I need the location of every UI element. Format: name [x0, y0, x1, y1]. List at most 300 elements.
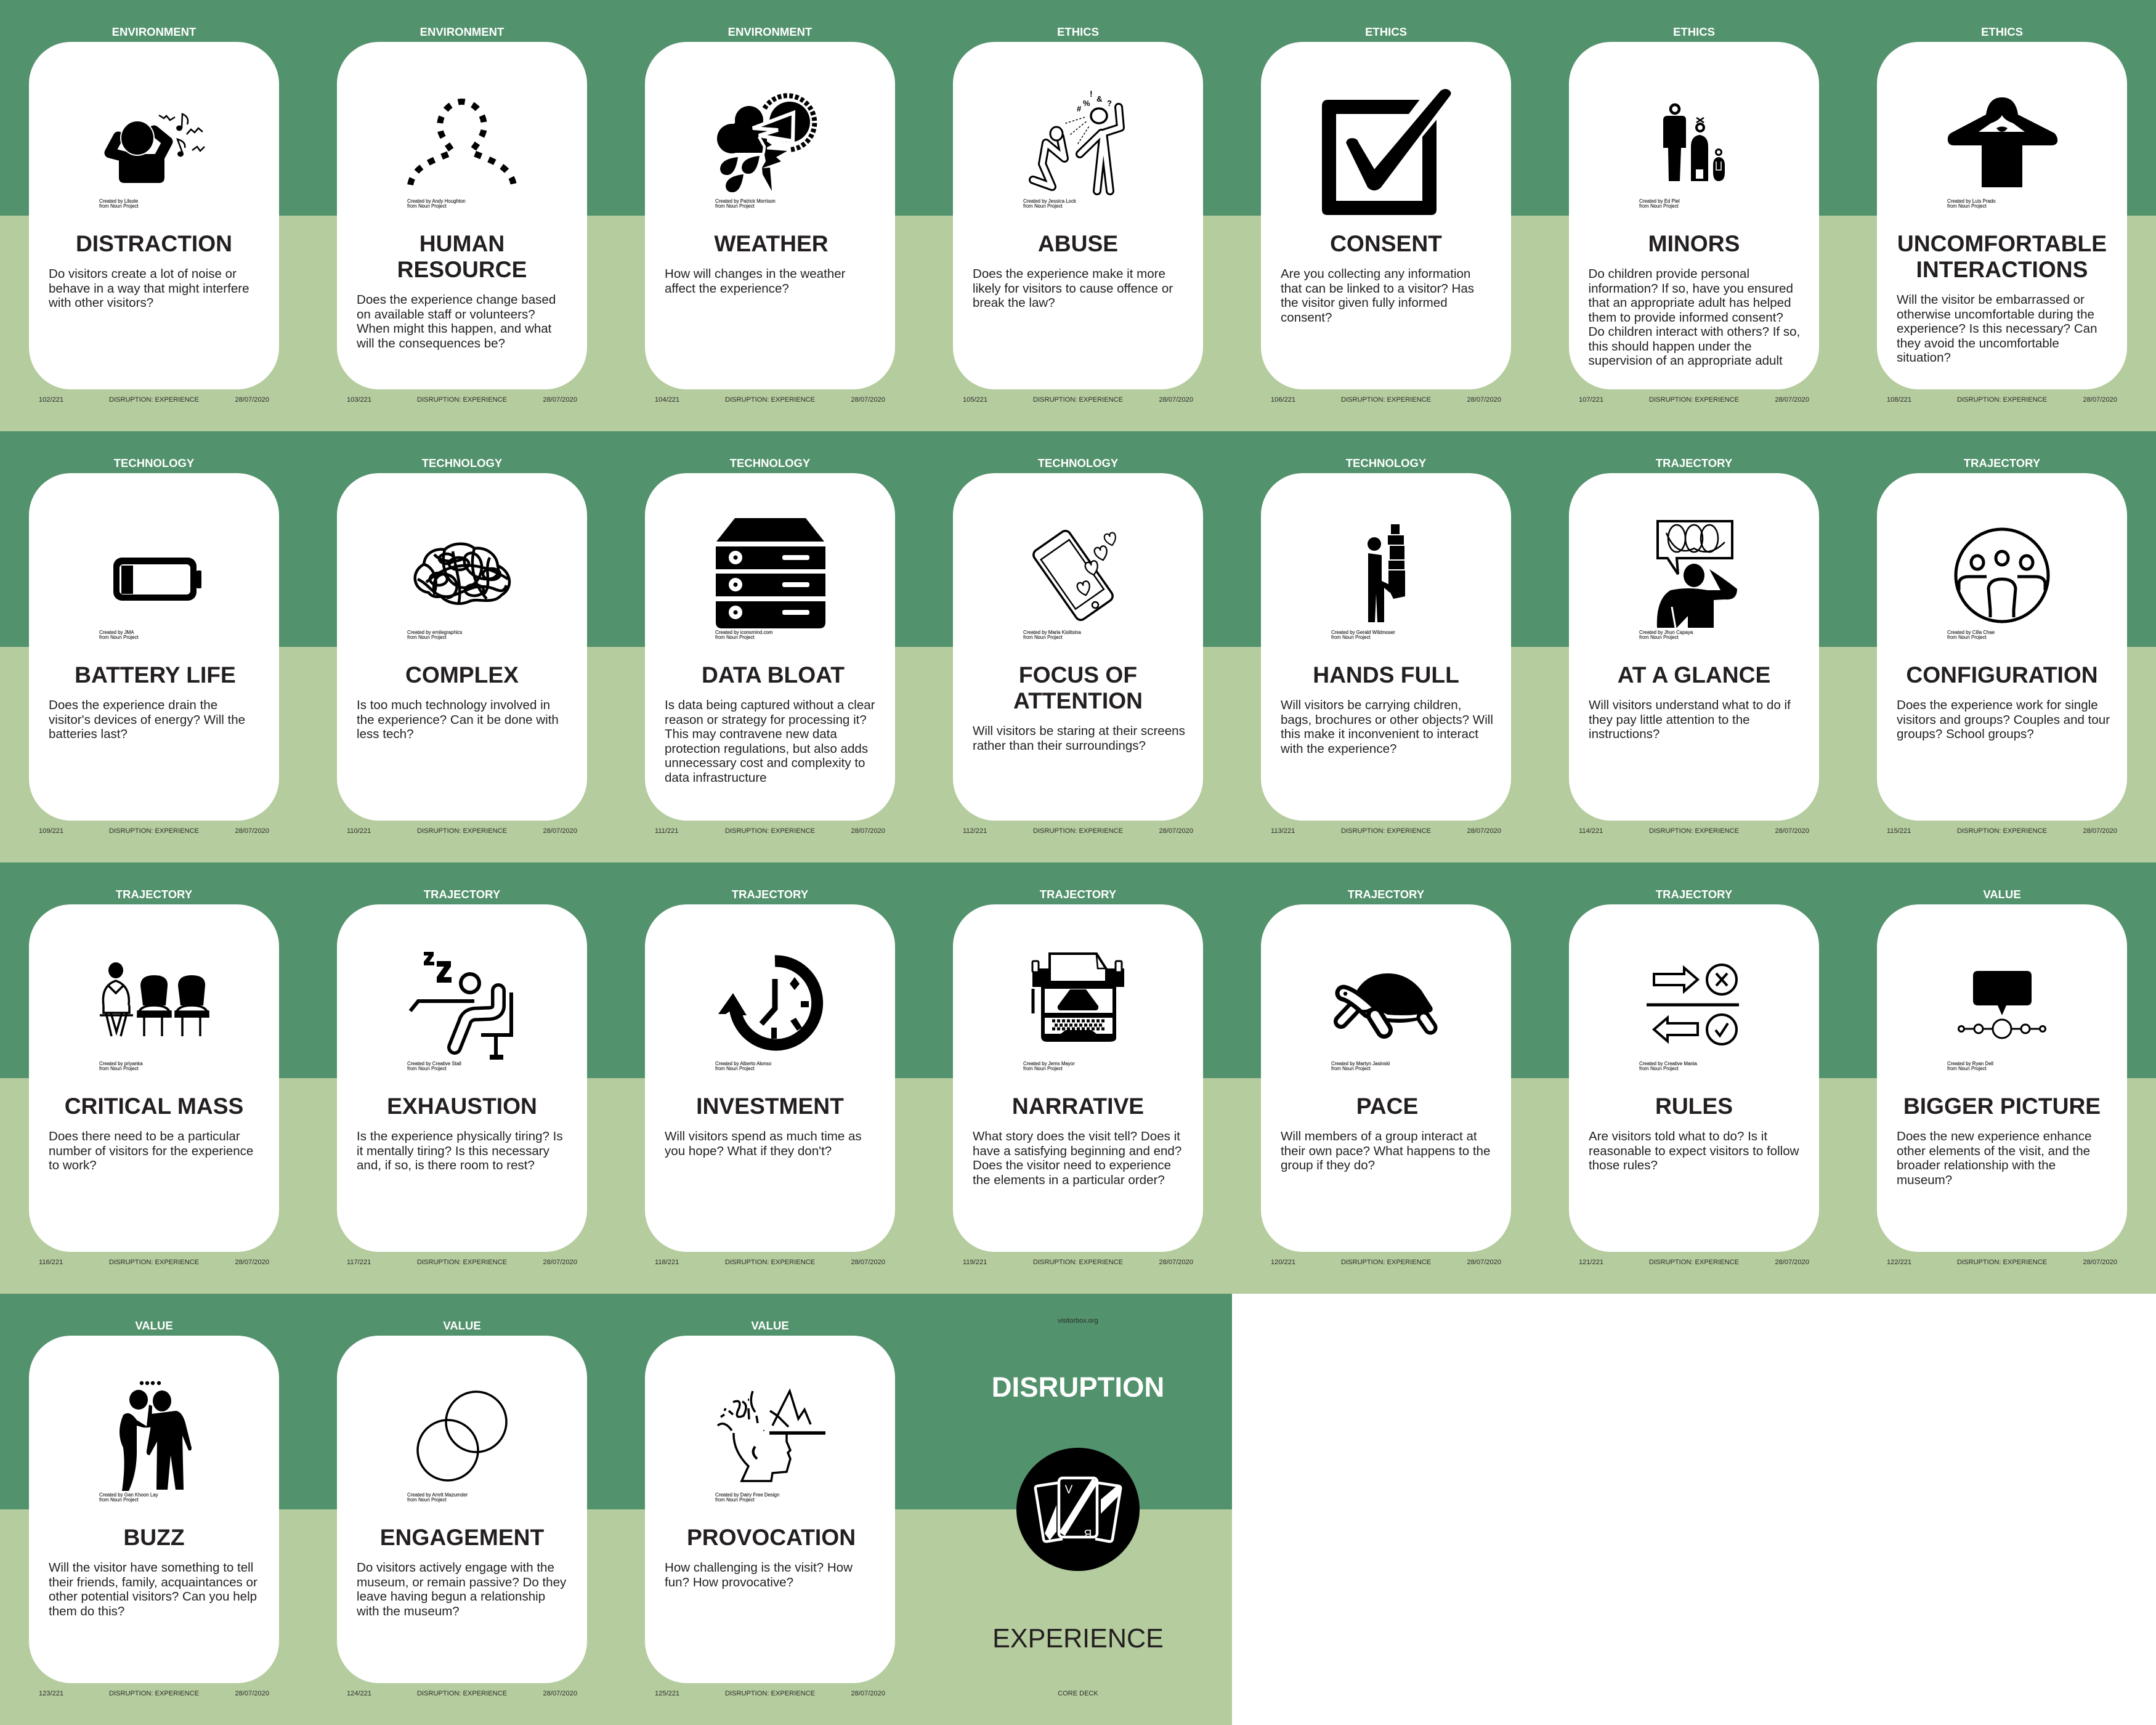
body text: consent? — [1281, 310, 1332, 324]
body text: leave having begun a relationship — [357, 1589, 545, 1604]
title: PROVOCATION — [687, 1524, 856, 1550]
footer: 116/221 — [39, 1259, 63, 1266]
title: RULES — [1655, 1093, 1733, 1119]
white card — [1569, 904, 1819, 1252]
footer: DISRUPTION: EXPERIENCE — [725, 1259, 815, 1266]
deck label: CORE DECK — [1058, 1690, 1098, 1697]
card: exhaustion — [308, 862, 616, 1294]
title: EXHAUSTION — [387, 1093, 537, 1119]
title: INTERACTIONS — [1916, 256, 2088, 282]
category label: TECHNOLOGY — [730, 457, 810, 469]
body text: otherwise uncomfortable during the — [1897, 307, 2094, 322]
icon credit — [407, 198, 466, 209]
footer: DISRUPTION: EXPERIENCE — [109, 396, 199, 404]
icon: figure shouting at kneeling figure: ! — [1090, 89, 1093, 99]
body text: and, if so, is there room to rest? — [357, 1158, 535, 1172]
icon credit: Created by Ryan Dell — [1947, 1061, 1993, 1066]
footer: DISRUPTION: EXPERIENCE — [1033, 1259, 1123, 1266]
body text: they pay little attention to the — [1589, 712, 1750, 727]
body text: unnecessary cost and complexity to — [665, 756, 865, 770]
body text — [665, 267, 846, 296]
category label: ENVIRONMENT — [112, 25, 196, 38]
footer — [616, 1259, 924, 1267]
footer: 122/221 — [1887, 1259, 1911, 1266]
body text: Will visitors spend as much time as — [665, 1129, 862, 1143]
icon credit — [1331, 630, 1395, 640]
footer — [963, 396, 1193, 404]
icon: group of three in a circle — [1954, 527, 2050, 624]
footer: DISRUPTION: EXPERIENCE — [417, 1259, 507, 1266]
footer: DISRUPTION: EXPERIENCE — [417, 827, 507, 835]
icon: two people whispering — [116, 1380, 193, 1492]
white card — [953, 473, 1203, 821]
body text: batteries last? — [49, 727, 128, 741]
footer: 28/07/2020 — [851, 1259, 885, 1266]
icon credit — [1639, 1061, 1697, 1071]
body text: rather than their surroundings? — [973, 738, 1146, 753]
body text: visitors and groups? Couples and tour — [1897, 712, 2110, 727]
footer: 28/07/2020 — [851, 396, 885, 404]
white card — [645, 473, 895, 821]
footer: DISRUPTION: EXPERIENCE — [1649, 1259, 1739, 1266]
icon: dashed person outline — [407, 99, 516, 185]
body text: less tech? — [357, 727, 414, 741]
icon credit: Created by Gerald Wildmoser — [1331, 630, 1395, 635]
title: ABUSE — [1038, 230, 1118, 256]
white card — [1569, 473, 1819, 821]
body text: Does the experience work for single — [1897, 698, 2098, 712]
category label: TRAJECTORY — [1040, 888, 1116, 901]
card: complex — [308, 431, 616, 862]
title: BUZZ — [123, 1524, 185, 1550]
card: rules — [1540, 862, 1848, 1294]
card: critical mass — [0, 862, 308, 1294]
category label: TECHNOLOGY — [1346, 457, 1426, 469]
footer: 118/221 — [655, 1259, 679, 1266]
footer: 109/221 — [39, 827, 63, 835]
panel: deck cover — [924, 1294, 1232, 1725]
icon credit: Created by Patrick Morrison — [715, 198, 776, 204]
icon credit: Created by Gan Khoon Lay — [99, 1492, 158, 1498]
footer — [1232, 827, 1540, 835]
body text: museum? — [1897, 1173, 1952, 1187]
white card — [1877, 42, 2127, 389]
icon credit — [1023, 198, 1076, 209]
body text: Does the visitor need to experience — [973, 1158, 1171, 1172]
icon: server stack — [716, 518, 825, 628]
body text: Are visitors told what to do? Is it — [1589, 1129, 1767, 1143]
icon credit — [715, 1493, 779, 1503]
body text: Do visitors actively engage with the — [357, 1561, 554, 1575]
icon: figure shouting at kneeling figure — [1029, 89, 1125, 195]
footer: 105/221 — [963, 396, 987, 404]
body text: bags, brochures or other objects? Will — [1281, 712, 1493, 727]
icon credit — [407, 630, 462, 640]
card: distraction — [0, 0, 308, 431]
footer: 106/221 — [1271, 396, 1295, 404]
icon credit: Created by Jems Mayor — [1023, 1061, 1075, 1066]
icon credit: Created by iconsmind.com — [715, 630, 772, 635]
body text: them to provide informed consent? — [1588, 310, 1783, 324]
body text: it mentally tiring? Is this necessary — [357, 1143, 549, 1158]
body text: Are you collecting any information — [1281, 267, 1470, 281]
body text: Will visitors understand what to do if — [1589, 698, 1791, 712]
category label: TECHNOLOGY — [1038, 457, 1118, 469]
icon credit: Created by Cilla Chae — [1947, 630, 1995, 635]
footer: DISRUPTION: EXPERIENCE — [1957, 1259, 2047, 1266]
white card — [29, 1336, 279, 1683]
category label: TRAJECTORY — [1348, 888, 1424, 901]
body text — [49, 267, 249, 310]
body text: Is too much technology involved in — [357, 698, 550, 712]
footer: DISRUPTION: EXPERIENCE — [1341, 396, 1431, 404]
footer: DISRUPTION: EXPERIENCE — [109, 1690, 199, 1697]
body text: Does the experience make it more — [973, 267, 1165, 281]
body text — [1897, 698, 2110, 742]
footer — [1887, 396, 2117, 404]
icon credit — [407, 1493, 468, 1503]
footer — [1271, 396, 1501, 404]
title: DISTRACTION — [76, 230, 232, 256]
body text: information? If so, have you ensured — [1588, 281, 1793, 296]
category label: VALUE — [443, 1319, 481, 1332]
title: HUMAN — [419, 230, 505, 256]
title: HANDS FULL — [1313, 662, 1459, 688]
footer — [0, 1690, 308, 1698]
body text: data infrastructure — [665, 770, 767, 785]
icon: speech bubble over timeline — [1958, 971, 2046, 1039]
body text: those rules? — [1589, 1158, 1658, 1172]
icon credit: Created by Maria Kislitsina — [1023, 630, 1081, 635]
icon credit: from Noun Project — [715, 203, 755, 209]
icon: head with lightning and scribbles — [715, 1389, 827, 1483]
icon: typewriter — [1030, 952, 1126, 1043]
icon credit — [1947, 630, 1995, 640]
body text: protection regulations, but also adds — [665, 742, 868, 755]
icon credit — [99, 630, 139, 640]
icon credit: from Noun Project — [99, 635, 139, 640]
white card — [953, 904, 1203, 1252]
footer: 28/07/2020 — [235, 1690, 269, 1697]
footer: DISRUPTION: EXPERIENCE — [1341, 827, 1431, 835]
icon credit: from Noun Project — [1331, 635, 1371, 640]
body text: groups? School groups? — [1897, 727, 2034, 741]
icon credit — [715, 630, 772, 640]
title: ENGAGEMENT — [380, 1524, 544, 1550]
title: BIGGER PICTURE — [1903, 1093, 2101, 1119]
title: CONSENT — [1330, 230, 1442, 256]
card: weather — [616, 0, 924, 431]
body text: Will visitors be staring at their screens — [973, 724, 1185, 738]
icon credit: Created by Ed Piel — [1639, 198, 1680, 204]
icon credit: from Noun Project — [1331, 1066, 1371, 1071]
white card — [645, 904, 895, 1252]
body text — [1281, 267, 1474, 324]
body text: them do this? — [49, 1604, 124, 1618]
body text: other potential visitors? Can you help — [49, 1589, 257, 1604]
body text: Will members of a group interact at — [1281, 1129, 1477, 1143]
icon: fanned cards logo: B — [1084, 1527, 1092, 1540]
title: NARRATIVE — [1012, 1093, 1144, 1119]
icon credit: Created by JMA — [99, 630, 134, 635]
icon: figure with hands over head — [1948, 97, 2057, 187]
body text: visitor's devices of energy? Will the — [49, 712, 245, 727]
footer: DISRUPTION: EXPERIENCE — [109, 827, 199, 835]
footer: 120/221 — [1271, 1259, 1295, 1266]
title: COMPLEX — [405, 662, 519, 688]
body text: How challenging is the visit? How — [665, 1561, 853, 1575]
footer — [1579, 396, 1809, 404]
body text: instructions? — [1589, 727, 1660, 741]
icon: clock with reverse arrow — [717, 956, 825, 1053]
white card — [645, 42, 895, 389]
white card — [645, 1336, 895, 1683]
body text — [665, 1129, 862, 1158]
footer — [347, 396, 577, 404]
title: CONFIGURATION — [1906, 662, 2098, 688]
body text — [1589, 698, 1791, 742]
category label: TECHNOLOGY — [114, 457, 194, 469]
footer: 119/221 — [963, 1259, 987, 1266]
card: uncomfortable interactions — [1848, 0, 2156, 431]
icon credit: from Noun Project — [99, 203, 139, 209]
icon: tortoise — [1333, 972, 1438, 1036]
icon credit: from Noun Project — [407, 1497, 447, 1503]
footer: 28/07/2020 — [235, 1259, 269, 1266]
body text: fun? How provocative? — [665, 1575, 793, 1589]
footer: 28/07/2020 — [2083, 1259, 2117, 1266]
body text: that can be linked to a visitor? Has — [1281, 281, 1474, 296]
footer — [616, 827, 924, 835]
footer: 28/07/2020 — [543, 827, 577, 835]
title: ATTENTION — [1013, 688, 1143, 713]
card: data bloat — [616, 431, 924, 862]
icon credit — [1947, 1061, 1993, 1071]
icon credit — [99, 198, 139, 209]
card: narrative — [924, 862, 1232, 1294]
footer: 28/07/2020 — [235, 827, 269, 835]
body text — [973, 1129, 1181, 1187]
category label: VALUE — [1983, 888, 2021, 901]
white card — [29, 42, 279, 389]
white card — [337, 904, 587, 1252]
footer — [1232, 1259, 1540, 1267]
footer: 111/221 — [655, 827, 678, 835]
body text — [1589, 1129, 1799, 1173]
white card — [953, 42, 1203, 389]
body text: the experience? Can it be done with — [357, 712, 559, 727]
body text: Does the experience drain the — [49, 698, 217, 712]
icon credit: from Noun Project — [407, 1066, 447, 1071]
icon credit — [1947, 198, 1996, 209]
footer: 114/221 — [1579, 827, 1603, 835]
title — [1897, 230, 2107, 282]
footer — [1848, 827, 2156, 835]
icon credit — [1331, 1061, 1390, 1071]
footer: 102/221 — [39, 396, 63, 404]
body text: museum, or remain passive? Do they — [357, 1575, 566, 1589]
icon: arrows with cross and tick — [1646, 962, 1740, 1044]
footer — [308, 827, 616, 835]
icon: figure shouting at kneeling figure: # — [1077, 104, 1082, 113]
footer: 107/221 — [1579, 396, 1603, 404]
footer: 117/221 — [347, 1259, 371, 1266]
category label: VALUE — [751, 1319, 789, 1332]
footer: DISRUPTION: EXPERIENCE — [725, 827, 815, 835]
icon credit: Created by Alberto Alonso — [715, 1061, 771, 1066]
body text: Does there need to be a particular — [49, 1129, 240, 1143]
body text — [1588, 267, 1800, 368]
icon: checked box — [1322, 89, 1451, 215]
icon: fanned cards logo: V — [1065, 1484, 1073, 1496]
body text — [665, 698, 875, 785]
card: consent — [1232, 0, 1540, 431]
category label: ETHICS — [1673, 25, 1715, 38]
icon credit: Created by Creative Mania — [1639, 1061, 1697, 1066]
icon credit: from Noun Project — [407, 635, 447, 640]
card: pace — [1232, 862, 1540, 1294]
card: investment — [616, 862, 924, 1294]
category label: ENVIRONMENT — [420, 25, 504, 38]
icon: person carrying stack of boxes — [1368, 524, 1406, 623]
title: DATA BLOAT — [702, 662, 845, 688]
body text: Is the experience physically tiring? Is — [357, 1129, 563, 1143]
footer: 28/07/2020 — [543, 1259, 577, 1266]
body text: Will visitors be carrying children, — [1281, 698, 1461, 712]
footer — [1848, 1259, 2156, 1267]
card: configuration — [1848, 431, 2156, 862]
body text — [665, 1561, 853, 1589]
footer: DISRUPTION: EXPERIENCE — [1649, 396, 1739, 404]
icon credit: from Noun Project — [99, 1497, 139, 1503]
body text — [1281, 698, 1493, 756]
card: human resource — [308, 0, 616, 431]
icon credit: Created by Lilsole — [99, 198, 138, 204]
icon credit: Created by Jessica Lock — [1023, 198, 1076, 204]
footer: 28/07/2020 — [1159, 1259, 1193, 1266]
body text — [49, 698, 245, 742]
body text: Is data being captured without a clear — [665, 698, 875, 712]
title: INVESTMENT — [696, 1093, 844, 1119]
footer: 103/221 — [347, 396, 371, 404]
icon: low battery — [113, 558, 201, 601]
icon: figure shouting at kneeling figure: ? — [1107, 99, 1112, 108]
footer: DISRUPTION: EXPERIENCE — [417, 1690, 507, 1697]
body text — [357, 1561, 566, 1618]
footer — [39, 396, 269, 404]
icon credit: from Noun Project — [715, 1066, 755, 1071]
icon credit — [99, 1493, 158, 1503]
footer: 28/07/2020 — [235, 396, 269, 404]
icon credit: from Noun Project — [1023, 203, 1063, 209]
icon credit: Created by Amrit Mazumder — [407, 1492, 468, 1498]
title: PACE — [1356, 1093, 1418, 1119]
icon credit: from Noun Project — [1947, 203, 1987, 209]
card: engagement — [308, 1294, 616, 1725]
card: minors — [1540, 0, 1848, 431]
icon: tangled brain — [413, 543, 511, 604]
white card — [337, 42, 587, 389]
title — [924, 662, 1232, 713]
footer — [0, 1259, 308, 1267]
footer: DISRUPTION: EXPERIENCE — [725, 1690, 815, 1697]
icon credit: from Noun Project — [715, 1497, 755, 1503]
body text: broader relationship with the — [1897, 1158, 2056, 1172]
icon: sleeping seated person — [409, 950, 515, 1061]
body text: affect the experience? — [665, 281, 789, 296]
white card — [1569, 42, 1819, 389]
icon credit: from Noun Project — [1639, 635, 1679, 640]
category label: TECHNOLOGY — [422, 457, 502, 469]
body text — [973, 267, 1173, 310]
footer — [1540, 827, 1848, 835]
footer — [655, 396, 885, 404]
icon credit: Created by Andy Houghton — [407, 198, 466, 204]
body text: situation? — [1897, 351, 1951, 365]
category label: ENVIRONMENT — [728, 25, 812, 38]
body text: have a satisfying beginning and end? — [973, 1143, 1181, 1158]
body text: When might this happen, and what — [357, 322, 551, 336]
body text: on available staff or volunteers? — [357, 307, 535, 322]
body text — [357, 698, 559, 742]
footer: 104/221 — [655, 396, 679, 404]
icon credit: Created by Dairy Free Design — [715, 1492, 779, 1498]
footer: 28/07/2020 — [1159, 396, 1193, 404]
body text: you hope? What if they don't? — [665, 1143, 832, 1158]
title — [397, 230, 527, 282]
card: hands full — [1232, 431, 1540, 862]
footer: 123/221 — [39, 1690, 63, 1697]
footer: 28/07/2020 — [1775, 827, 1809, 835]
footer: 28/07/2020 — [1159, 827, 1193, 835]
body text — [1897, 1129, 2091, 1187]
category label: TRAJECTORY — [1656, 457, 1732, 469]
body text — [1281, 1129, 1490, 1173]
footer: 28/07/2020 — [1467, 827, 1501, 835]
icon: overlapping circles — [416, 1390, 508, 1482]
footer — [616, 1690, 924, 1698]
body text — [973, 724, 1185, 753]
card: focus of attention — [924, 431, 1232, 862]
white card — [337, 1336, 587, 1683]
cover title: disruption: DISRUPTION — [992, 1371, 1164, 1403]
card: at a glance — [1540, 431, 1848, 862]
body text — [1897, 293, 2097, 365]
title: MINORS — [1648, 230, 1740, 256]
body text: that an appropriate adult has helped — [1588, 296, 1791, 310]
white card — [1877, 904, 2127, 1252]
icon credit: Created by Luis Prado — [1947, 198, 1996, 204]
footer: DISRUPTION: EXPERIENCE — [1033, 827, 1123, 835]
body text: supervision of an appropriate adult — [1588, 354, 1783, 368]
body text: break the law? — [973, 296, 1055, 310]
body text: to work? — [49, 1158, 97, 1172]
icon: adult and two children — [1663, 104, 1725, 181]
body text: this make it inconvenient to interact — [1281, 727, 1478, 741]
footer: 125/221 — [655, 1690, 679, 1697]
icon credit: from Noun Project — [1023, 635, 1063, 640]
category label: TRAJECTORY — [424, 888, 500, 901]
icon: figure shouting at kneeling figure: % — [1083, 99, 1090, 108]
footer — [308, 1690, 616, 1698]
body text: This may contravene new data — [665, 727, 837, 741]
category label: TRAJECTORY — [116, 888, 192, 901]
body text: likely for visitors to cause offence or — [973, 281, 1173, 296]
icon: phone with hearts — [1029, 527, 1120, 624]
category label: TRAJECTORY — [1964, 457, 2040, 469]
white card — [337, 473, 587, 821]
body text: Does the experience change based — [357, 293, 556, 307]
